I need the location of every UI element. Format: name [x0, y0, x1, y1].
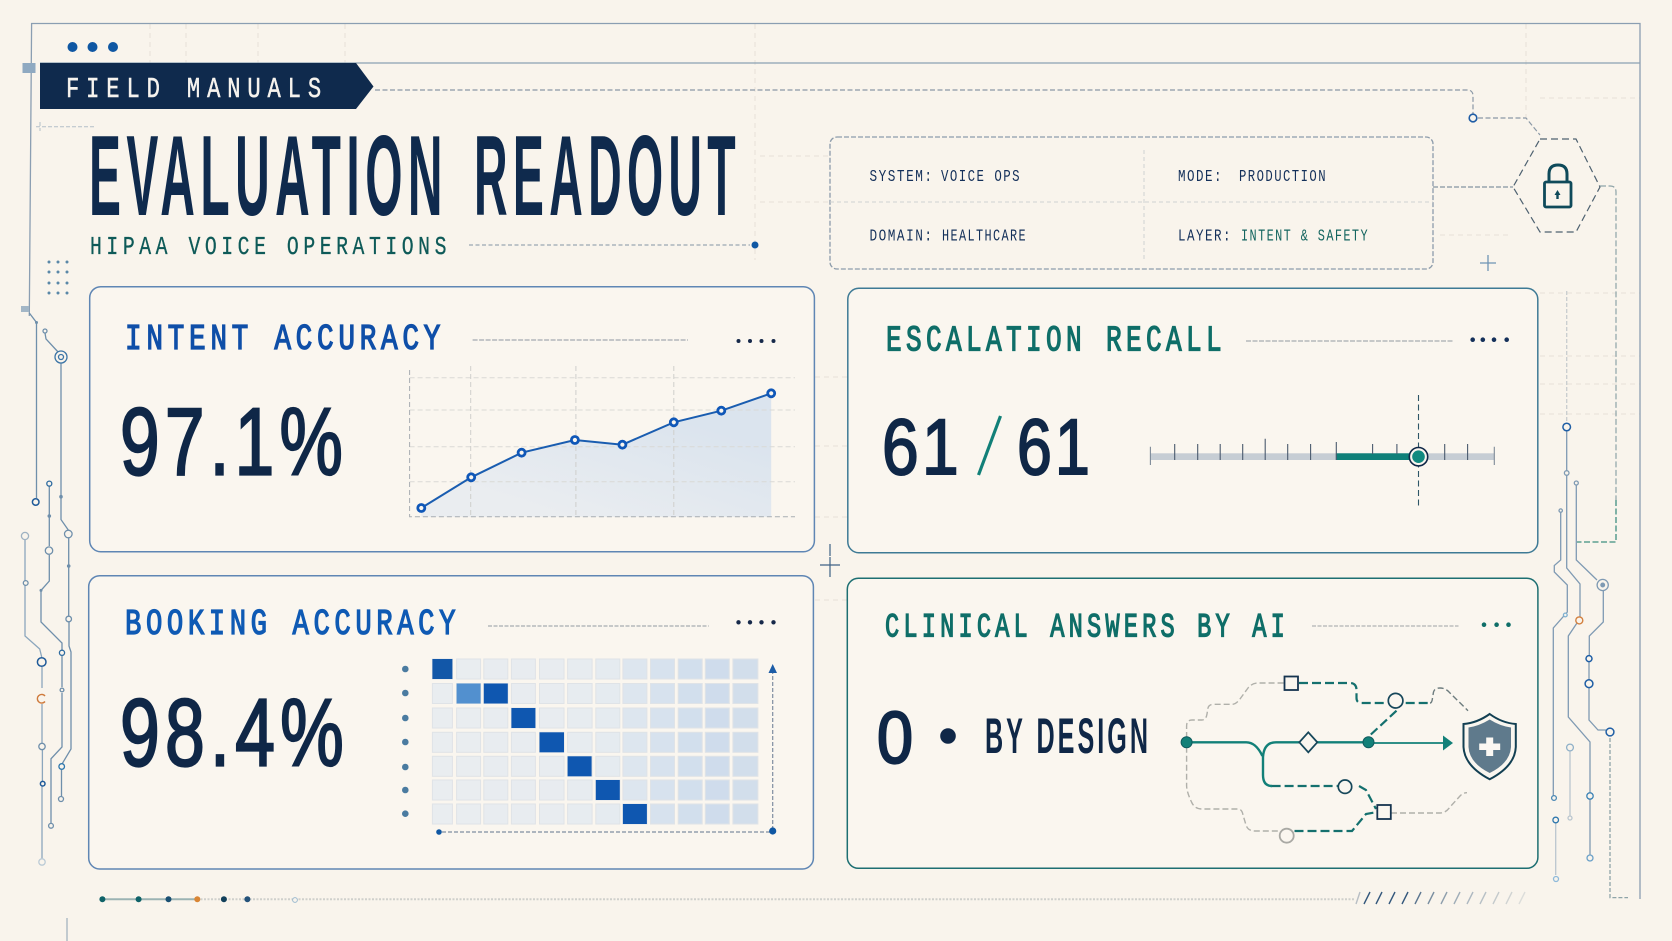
crosshair mark: [36, 122, 94, 131]
connector to lock: [1433, 186, 1513, 188]
panel: escalation recall: [848, 288, 1538, 553]
metric value: 97.1%: [120, 388, 348, 496]
heading: ESCALATION RECALL: [886, 320, 1226, 362]
by design label: BY DESIGN: [985, 708, 1151, 764]
panel: booking accuracy: [89, 576, 813, 869]
plus mark: [1480, 255, 1496, 271]
info: layer: LAYER:: [1178, 228, 1232, 247]
heading: CLINICAL ANSWERS BY AI: [885, 610, 1289, 648]
info: mode: MODE:: [1178, 168, 1223, 187]
title: EVALUATION: [89, 113, 448, 240]
line chart: [410, 366, 795, 517]
metric value: 61: [1017, 402, 1093, 491]
flow diagram: [1181, 676, 1468, 843]
info: domain: DOMAIN:: [870, 228, 934, 247]
heading rule and dots: [473, 339, 776, 343]
corner square: [22, 63, 36, 73]
panel: system info: [830, 137, 1433, 269]
connector from banner: [375, 90, 1540, 135]
info: system: SYSTEM:: [870, 168, 934, 187]
icon: lock in hexagon: [1513, 139, 1600, 232]
text: READOUT: [474, 113, 741, 240]
center plus mark: [820, 544, 840, 577]
heatmap: [402, 659, 777, 835]
bullet: [940, 728, 956, 744]
info: domain: HEALTHCARE: [942, 228, 1027, 247]
dot grid: [48, 260, 68, 294]
header dots: [68, 42, 118, 52]
heading: INTENT ACCURACY: [125, 319, 445, 360]
metric value: [882, 402, 1093, 491]
metric value: 0: [877, 698, 913, 779]
metric value: 61: [882, 402, 962, 491]
right circuit traces: [1552, 291, 1628, 898]
banner: field manuals: FIELD MANUALS: [66, 73, 328, 106]
info: layer: INTENT & SAFETY: [1241, 228, 1369, 247]
heading: BOOKING ACCURACY: [125, 604, 460, 645]
info: layer: [1178, 228, 1369, 247]
heading rule and dots: [1246, 337, 1509, 342]
banner: field manuals: [40, 63, 374, 109]
panel: intent accuracy: [90, 287, 814, 552]
heading rule and dots: [488, 620, 776, 626]
left circuit traces: [21, 306, 72, 865]
subtitle: HIPAA VOICE OPERATIONS: [90, 232, 451, 262]
info: domain: [870, 228, 1027, 247]
info: system: [870, 168, 1021, 187]
metric value: 98.4%: [120, 680, 349, 786]
heading rule and dots: [1312, 622, 1511, 627]
footer timeline: [99, 896, 1354, 902]
connector: green return: [1577, 500, 1616, 542]
panel: clinical answers by ai: [847, 578, 1538, 868]
info: mode: [1178, 168, 1327, 187]
info: system: VOICE OPS: [941, 168, 1021, 187]
icon: shield: [1464, 714, 1516, 779]
footer tick: [66, 918, 68, 941]
footer hatch marks: [1356, 892, 1525, 904]
info: mode: PRODUCTION: [1239, 168, 1327, 187]
subtitle rule: [469, 242, 758, 248]
range gauge: [1150, 395, 1494, 507]
connector: lock to recall panel: [1600, 186, 1616, 500]
